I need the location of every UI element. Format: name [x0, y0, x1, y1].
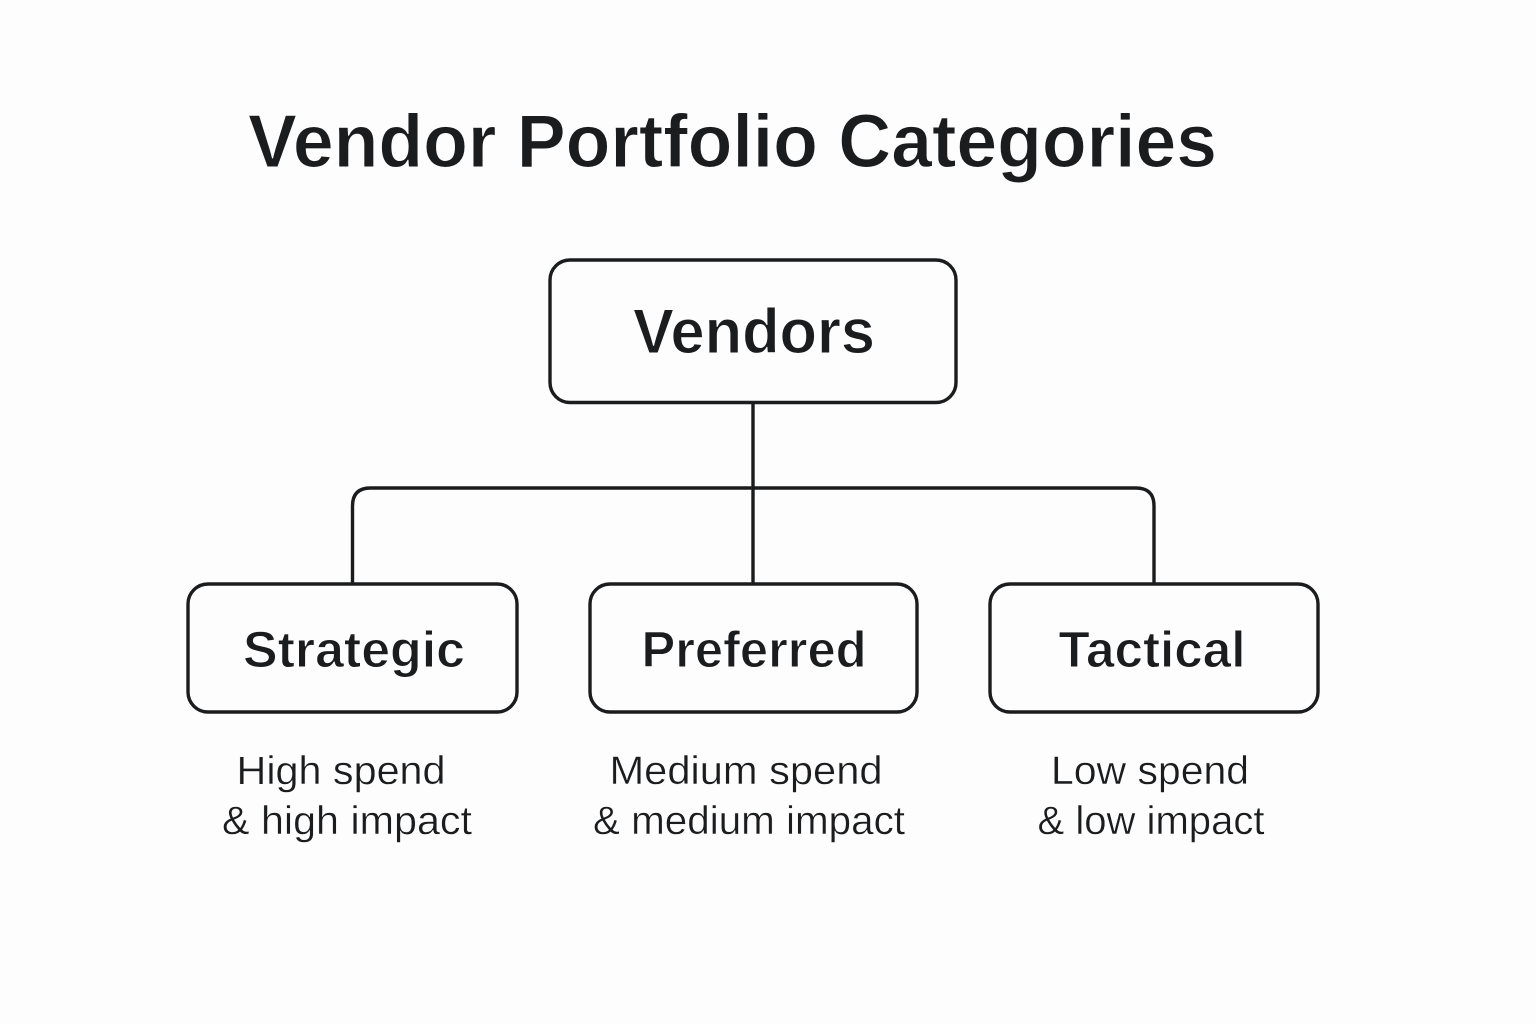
- title: Vendor Portfolio Categories: [248, 99, 1217, 183]
- description: Preferred: & medium impact: [593, 799, 905, 843]
- description: Tactical: Low spend: [1051, 749, 1249, 793]
- description: Strategic: High spend: [236, 749, 446, 793]
- description: Tactical: [1038, 749, 1264, 843]
- description: Preferred: [593, 749, 905, 843]
- box: Vendors: [550, 260, 956, 402]
- connector lines: [352, 403, 1154, 583]
- description: Tactical: & low impact: [1038, 799, 1264, 843]
- box: Strategic: Strategic: [243, 621, 465, 678]
- box: Tactical: Tactical: [1058, 621, 1246, 678]
- box: Preferred: Preferred: [642, 621, 866, 678]
- description: Strategic: [222, 749, 472, 843]
- description: Preferred: Medium spend: [610, 749, 882, 793]
- box: Tactical: [990, 584, 1318, 712]
- description: Strategic: & high impact: [222, 799, 472, 843]
- box: Strategic: [188, 584, 517, 712]
- box: Preferred: [590, 584, 917, 712]
- box: Vendors: Vendors: [633, 297, 875, 367]
